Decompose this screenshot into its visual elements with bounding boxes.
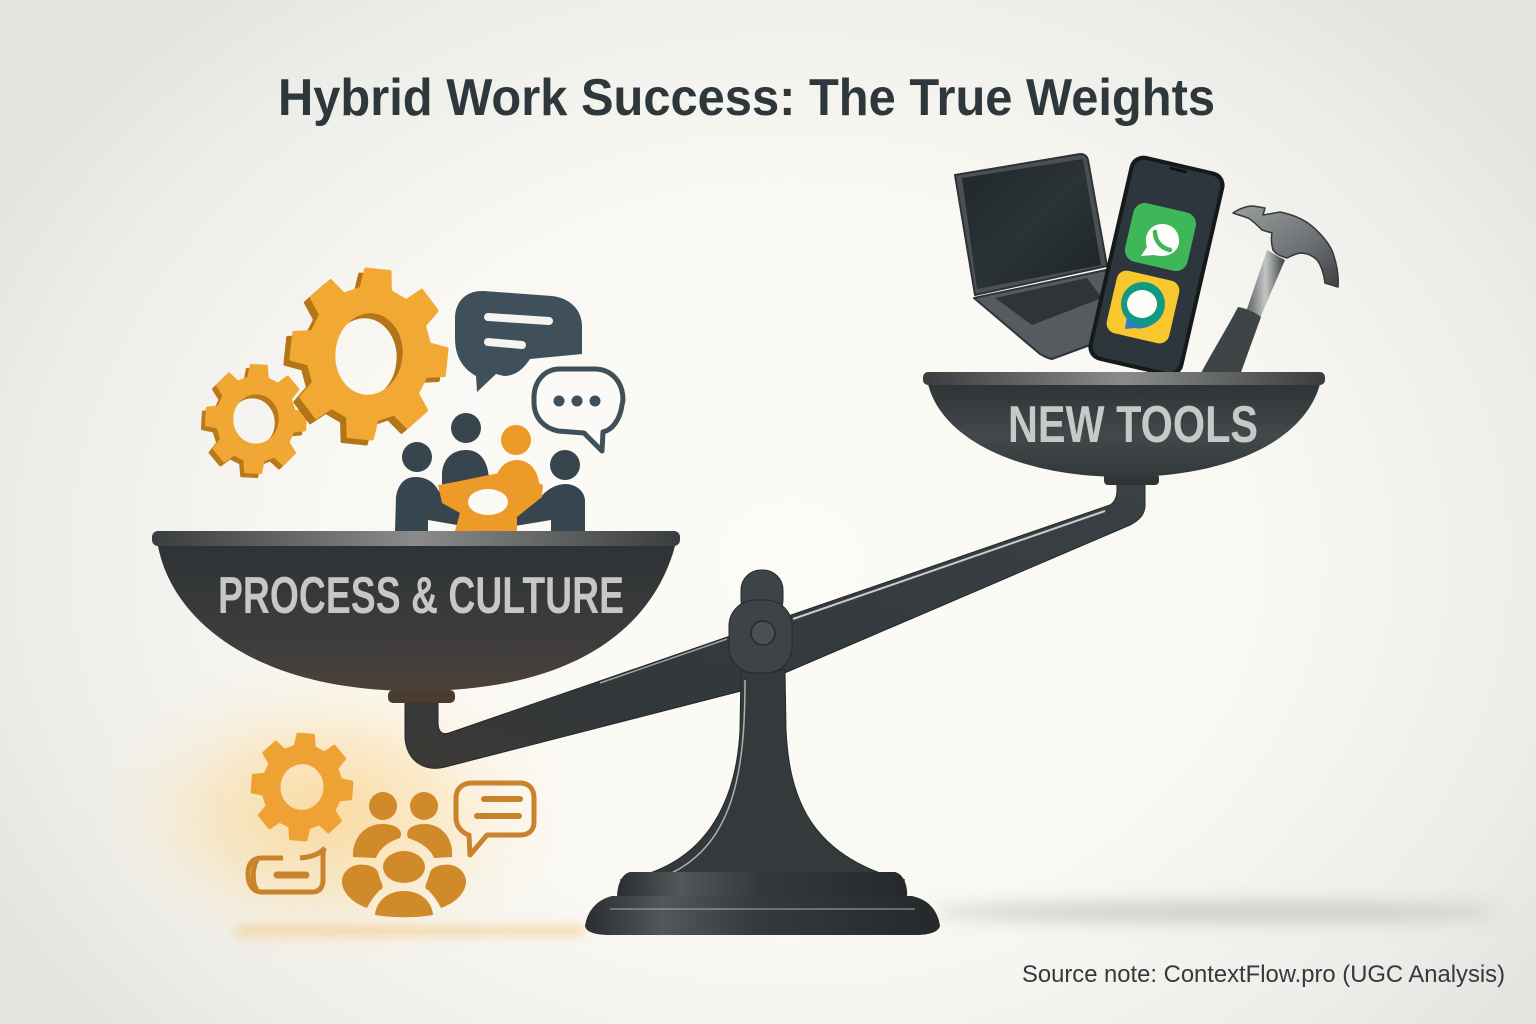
icon: dark speech bubble <box>455 291 582 392</box>
pivot plate <box>729 600 792 673</box>
beam highlight <box>793 511 1105 619</box>
base highlight <box>610 908 915 910</box>
left pan connector <box>388 690 455 703</box>
icon: orange outlined speech bubble <box>456 783 534 855</box>
icon: small gear <box>200 363 308 479</box>
orange glow behind lower icons <box>75 650 575 980</box>
scale beam <box>405 478 1145 768</box>
left pan label: PROCESS & CULTURE <box>218 567 624 625</box>
stand upper base <box>617 872 907 898</box>
icon: orange link pill <box>248 848 325 892</box>
pivot bolt <box>751 621 775 645</box>
icon: laptop <box>955 154 1107 359</box>
right pan connector <box>1104 474 1159 485</box>
lower orange icon group <box>248 731 534 917</box>
icon group: laptop phone hammer in right pan <box>955 153 1338 379</box>
ground shadow left <box>235 926 585 936</box>
icon: hammer <box>1200 206 1338 375</box>
stand lower base <box>585 896 940 935</box>
pivot knob <box>741 570 783 620</box>
right pan label: NEW TOOLS <box>1008 396 1258 454</box>
icon: large gear <box>278 262 454 451</box>
icon: orange people group <box>342 792 466 917</box>
icon group: process and culture items in left pan <box>200 262 623 531</box>
icon: orange gear <box>249 731 355 843</box>
title: Hybrid Work Success: The True Weights <box>278 69 1215 127</box>
icon: green messaging app <box>1123 201 1198 273</box>
icon: smartphone <box>1086 153 1227 379</box>
stand highlight <box>660 680 745 878</box>
ground shadow right <box>930 903 1500 921</box>
icon: outlined speech bubble with dots <box>534 369 623 451</box>
icon: yellow messaging app <box>1105 269 1181 345</box>
beam highlight left <box>600 639 727 683</box>
stand column <box>620 670 905 880</box>
balance scale <box>152 372 1325 935</box>
right pan <box>923 372 1325 477</box>
left pan <box>152 531 680 691</box>
icon: team of people around table <box>395 413 585 531</box>
source note: Source note: ContextFlow.pro (UGC Analysis) <box>1022 961 1505 988</box>
